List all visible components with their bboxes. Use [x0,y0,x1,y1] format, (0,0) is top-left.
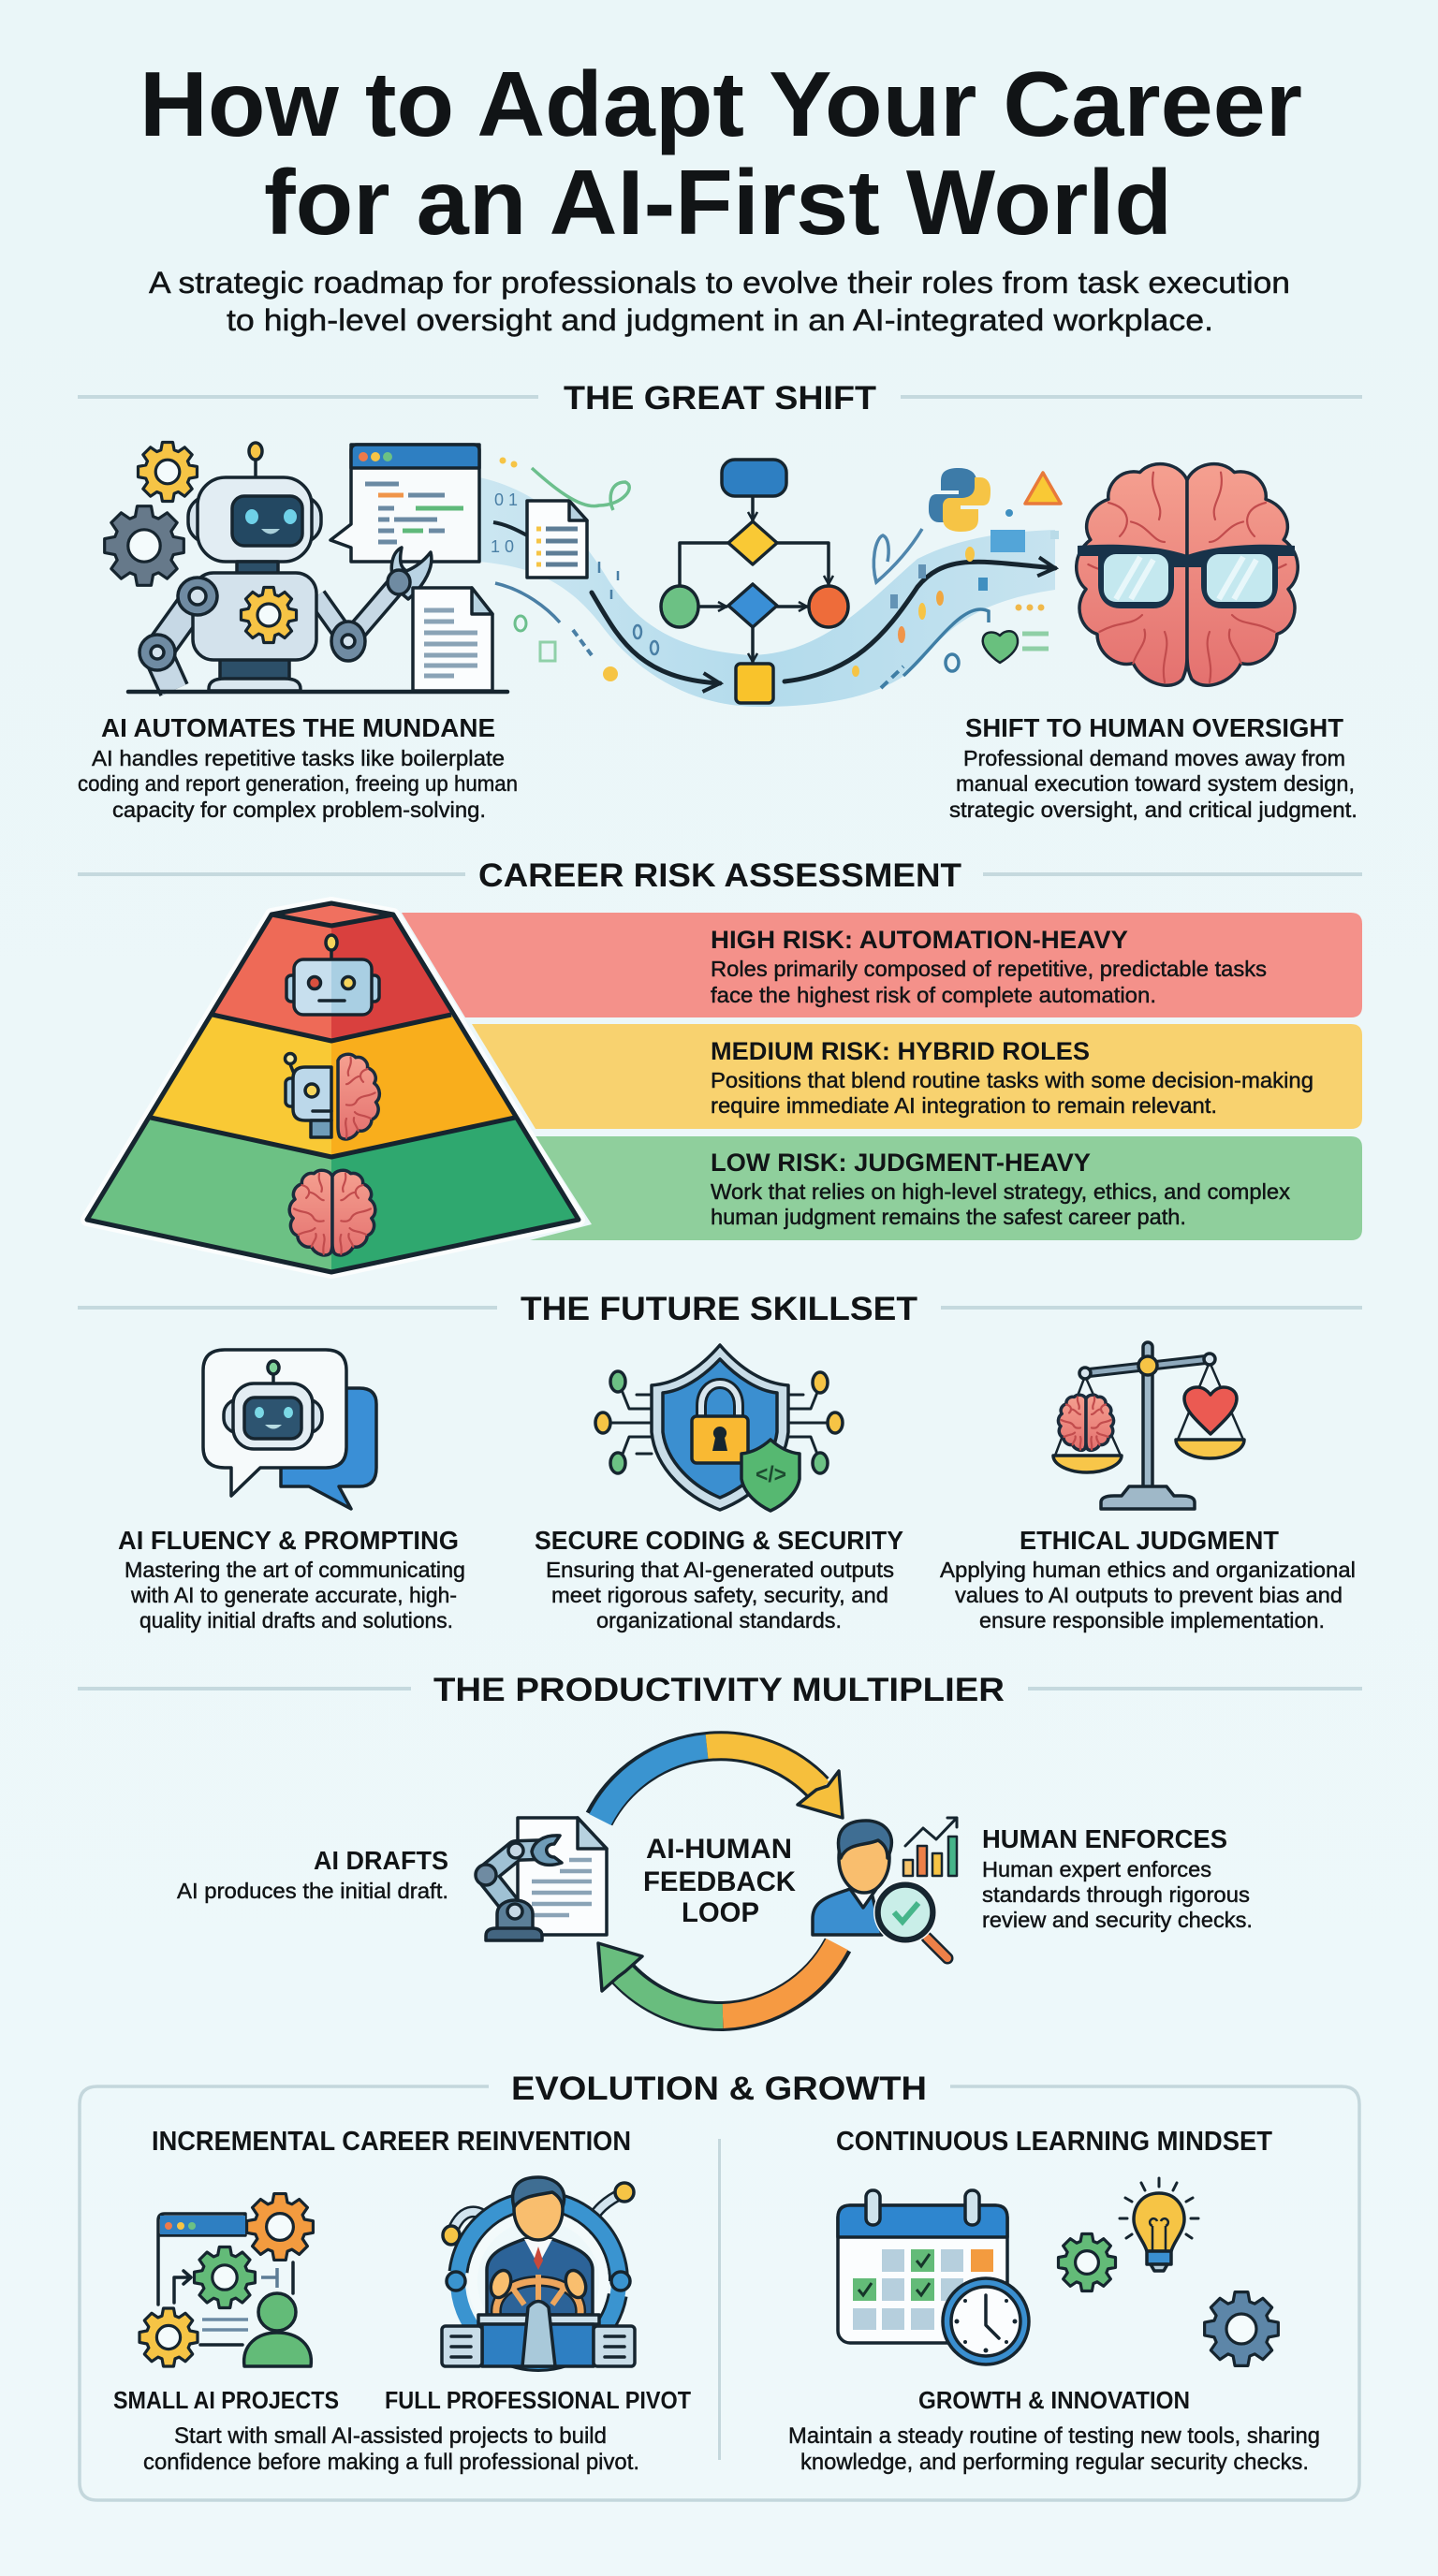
subheading: continuous learning mindset: CONTINUOUS LEARNING MINDSET [836,2127,1272,2157]
icon: python logo [929,468,990,532]
text: human enforces [982,1824,1253,1932]
pyramid [87,903,579,1272]
arrow: curve into flowchart [592,593,720,683]
band: low risk [530,1136,1362,1240]
text: medium risk: require immediate AI integration to remain relevant. [711,1093,1217,1118]
text: small AI projects and pivot labels: FULL PROFESSIONAL PIVOT [385,2386,691,2414]
flow ribbon [479,477,1055,707]
section: career risk assessment [78,857,1362,1272]
subheading: incremental career reinvention: INCREMENTAL CAREER REINVENTION [152,2127,631,2157]
text: reinvention description [143,2423,639,2475]
heading: the productivity multiplier: THE PRODUCTIVITY MULTIPLIER [433,1672,1005,1708]
text: human enforces: standards through rigorous [982,1882,1250,1907]
text: secure coding and security: meet rigorous safety, security, and [551,1583,888,1607]
text: AI automates the mundane [78,713,518,822]
text: low risk [711,1149,1291,1229]
text: AI automates the mundane: AI AUTOMATES THE MUNDANE [101,713,495,742]
text: medium risk: Positions that blend routine tasks with some decision-making [711,1068,1313,1092]
text: AI fluency and prompting: Mastering the art of communicating [125,1558,465,1582]
text: human enforces: Human expert enforces [982,1857,1211,1881]
section: the future skillset [78,1291,1362,1632]
text: growth description [788,2423,1320,2475]
icon: brain [289,1170,375,1255]
band: medium risk [472,1024,1362,1129]
text: loop label: FEEDBACK [643,1866,796,1897]
decorative data symbols left: 1 0 [491,537,514,556]
subtitle: A strategic roadmap for professionals to evolve their roles from task execution [149,266,1290,300]
decorative data symbols left: 0 1 [494,490,518,509]
text: ethical judgment: ETHICAL JUDGMENT [1020,1526,1279,1555]
title [139,52,1302,254]
subtitle: to high-level oversight and judgment in an AI-integrated workplace. [227,303,1213,337]
decorative data symbols left [491,457,658,681]
icon: code window speech bubble [330,445,479,562]
text: ethical judgment: Applying human ethics and organizational [940,1558,1356,1582]
text: reinvention description: Start with small AI-assisted projects to build [174,2423,607,2449]
text: loop label: LOOP [682,1897,759,1928]
icon: security shield [595,1345,843,1511]
text: reinvention description: confidence before making a full professional pivot. [143,2450,639,2475]
subtitle [149,266,1290,337]
icon: calendar with clock [838,2190,1029,2364]
text: AI automates the mundane: coding and report generation, freeing up human [78,771,518,796]
text: AI fluency and prompting: quality initial drafts and solutions. [139,1608,453,1632]
text: secure coding and security: organizational standards. [596,1608,842,1632]
icon: robot with gears [105,443,507,692]
text: AI fluency and prompting [118,1526,465,1632]
text: medium risk: MEDIUM RISK: HYBRID ROLES [711,1037,1090,1065]
icon: wrench hand [388,548,432,599]
icon: blue gear [1205,2292,1278,2365]
icon: half robot half brain [285,1054,379,1139]
text: loop label: AI-HUMAN [646,1834,792,1865]
text: medium risk [711,1037,1313,1118]
text: shift to human oversight: strategic oversight, and critical judgment. [949,798,1357,822]
text: AI automates the mundane: AI handles repetitive tasks like boilerplate [92,746,505,770]
icon: balance scale [1053,1342,1244,1509]
icon: human reviewer with chart [813,1818,957,1958]
text: shift to human oversight: manual execution toward system design, [956,771,1355,796]
text: ethical judgment: values to AI outputs to prevent bias and [955,1583,1343,1607]
icon: green gear [1058,2233,1116,2291]
section: the great shift [78,380,1362,822]
text: ethical judgment [940,1526,1356,1632]
text: small AI projects and pivot labels [113,2386,691,2414]
heading: the future skillset: THE FUTURE SKILLSET [521,1291,917,1327]
text: shift to human oversight: Professional demand moves away from [963,746,1345,770]
decorative data symbols right [852,509,1059,688]
text: high risk: Roles primarily composed of repetitive, predictable tasks [711,957,1267,981]
arrow: curve to brain [785,562,1055,681]
heading: the great shift: THE GREAT SHIFT [564,380,876,417]
band: high risk [402,913,1362,1017]
text: growth description: Maintain a steady routine of testing new tools, sharing [788,2423,1320,2449]
heading: evolution and growth: EVOLUTION & GROWTH [511,2071,927,2107]
text: loop label [643,1834,796,1928]
text: growth description: knowledge, and performing regular security checks. [800,2450,1309,2475]
icon: light bulb [1120,2178,1198,2271]
text: secure coding and security: SECURE CODING & SECURITY [535,1526,903,1555]
icon: chat bubbles with robot [203,1350,376,1509]
title: How to Adapt Your Career [139,52,1302,155]
icon: brain with glasses [1077,464,1298,685]
icon: professional at helm [442,2177,635,2366]
text: AI drafts: AI produces the initial draft. [177,1879,448,1903]
text: ethical judgment: ensure responsible implementation. [979,1608,1325,1632]
title: for an AI-First World [264,151,1172,254]
text: shift to human oversight [949,713,1357,822]
icon: warning triangle [1025,473,1061,504]
text: AI fluency and prompting: with AI to generate accurate, high- [130,1583,457,1607]
icon: small AI projects [139,2194,313,2366]
icon: robot arm with document [476,1818,607,1940]
heading: career risk assessment: CAREER RISK ASSESSMENT [478,857,961,894]
text: human enforces: review and security checks. [982,1908,1253,1932]
text: high risk: HIGH RISK: AUTOMATION-HEAVY [711,926,1128,954]
arrow: bottom loop [598,1943,838,2016]
arrow: top loop [599,1746,843,1820]
flowchart [661,460,848,703]
icon: report document [413,588,492,691]
text: small AI projects and pivot labels: SMALL AI PROJECTS [113,2386,339,2414]
panel: evolution and growth [80,2071,1359,2500]
text: high risk [711,926,1267,1007]
text: human enforces: HUMAN ENFORCES [982,1824,1227,1853]
section: the productivity multiplier [78,1672,1362,2016]
text: low risk: human judgment remains the safest career path. [711,1205,1186,1229]
text: secure coding and security: Ensuring that AI-generated outputs [546,1558,894,1582]
text: AI drafts: AI DRAFTS [314,1846,448,1875]
icon: small document [527,501,587,578]
text: AI fluency and prompting: AI FLUENCY & PROMPTING [118,1526,459,1555]
icon: security shield: </> [756,1462,786,1487]
text: shift to human oversight: SHIFT TO HUMAN OVERSIGHT [965,713,1343,742]
text: low risk: LOW RISK: JUDGMENT-HEAVY [711,1149,1091,1177]
text: low risk: Work that relies on high-level strategy, ethics, and complex [711,1179,1291,1204]
text: AI automates the mundane: capacity for complex problem-solving. [112,798,486,822]
icon: robot head [286,935,379,1015]
text: high risk: face the highest risk of complete automation. [711,983,1156,1007]
text: AI drafts [177,1846,448,1903]
text: growth and innovation: GROWTH & INNOVATION [918,2386,1190,2414]
text: secure coding and security [535,1526,903,1632]
